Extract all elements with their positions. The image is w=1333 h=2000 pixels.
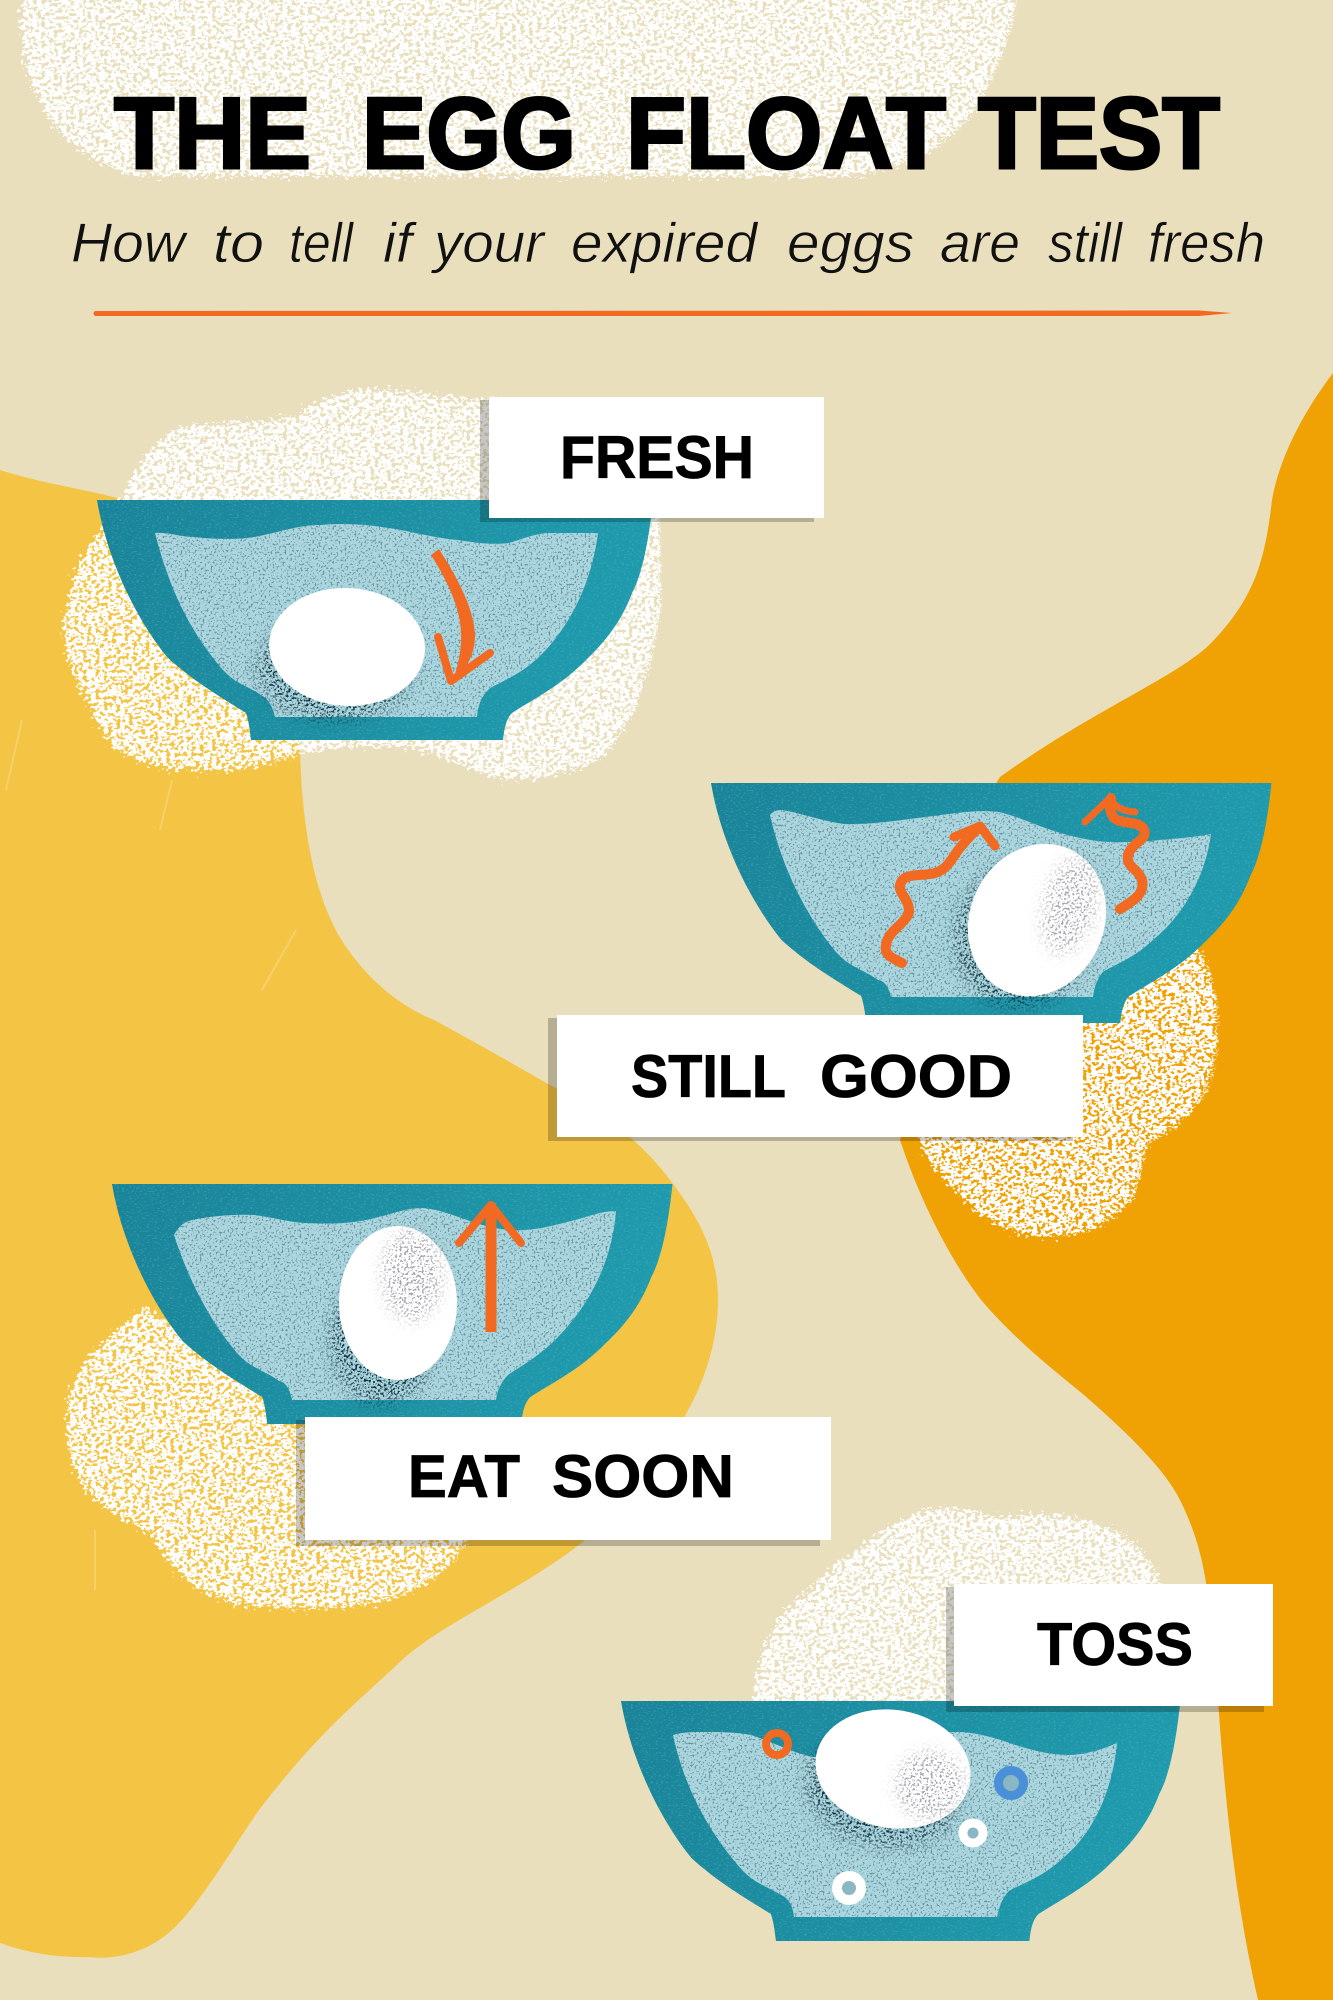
bubble: blue xyxy=(998,1770,1024,1796)
bowl: toss xyxy=(621,1697,1180,1941)
egg xyxy=(806,1697,980,1841)
speckled blob: toss xyxy=(754,1509,1170,1705)
subtitle: your xyxy=(430,211,546,274)
water xyxy=(770,810,1211,997)
speckled blob: top xyxy=(22,0,1018,176)
label: eat soon: EAT xyxy=(408,1443,520,1510)
title: THE xyxy=(114,78,311,190)
egg shadow xyxy=(794,1719,970,1861)
speckled blob: still good xyxy=(900,950,1219,1237)
title: TEST xyxy=(978,78,1220,190)
bowl: still good xyxy=(711,783,1271,1031)
subtitle: How xyxy=(71,211,189,274)
bowl: eat soon xyxy=(112,1184,672,1424)
speckled blob: eat soon xyxy=(68,1308,500,1608)
speckled blob: fresh xyxy=(65,389,662,778)
yellow background shape xyxy=(0,470,718,1958)
orange background shape xyxy=(900,373,1333,2000)
subtitle xyxy=(71,211,1265,274)
bowl body xyxy=(112,1184,672,1424)
water xyxy=(673,1732,1117,1917)
egg xyxy=(943,821,1131,1019)
bowl: fresh xyxy=(97,500,653,740)
arrow: wavy right xyxy=(1085,797,1145,909)
egg speckle xyxy=(382,1229,442,1321)
bowl body xyxy=(711,783,1271,1023)
subtitle: eggs xyxy=(787,211,914,274)
title: EGG xyxy=(362,78,576,190)
subtitle: to xyxy=(213,211,264,274)
label: eat soon xyxy=(296,1417,831,1546)
water xyxy=(155,524,598,717)
label: still good: STILL xyxy=(631,1043,786,1110)
egg shadow xyxy=(330,1276,434,1404)
egg shadow xyxy=(929,839,1115,1031)
bubble: white left xyxy=(837,1876,861,1900)
egg shadow xyxy=(257,616,413,720)
title: FLOAT xyxy=(626,78,946,190)
subtitle: are xyxy=(940,211,1020,274)
subtitle: expired xyxy=(571,211,759,274)
orange brush line xyxy=(94,310,1232,316)
label: eat soon: SOON xyxy=(552,1443,734,1510)
label: fresh xyxy=(480,397,824,522)
arrow: up xyxy=(459,1205,521,1332)
egg xyxy=(339,1226,457,1380)
title xyxy=(114,78,1220,190)
subtitle: still xyxy=(1048,211,1123,274)
bowl body xyxy=(97,500,653,740)
label: still good: GOOD xyxy=(820,1043,1012,1110)
subtitle: if xyxy=(383,211,418,274)
label: toss xyxy=(946,1584,1273,1712)
bowl body xyxy=(621,1701,1180,1941)
bubble: white right xyxy=(963,1823,983,1843)
arrow: wavy left xyxy=(886,826,995,963)
egg speckle xyxy=(896,1751,964,1819)
egg xyxy=(266,584,428,710)
subtitle: tell xyxy=(289,211,354,274)
label: fresh: FRESH xyxy=(560,424,754,491)
label: still good xyxy=(548,1015,1083,1141)
bubble: orange xyxy=(766,1733,788,1755)
label: toss: TOSS xyxy=(1037,1611,1193,1678)
egg speckle xyxy=(1032,850,1108,960)
arrow: down xyxy=(431,549,490,684)
subtitle: fresh xyxy=(1148,211,1265,274)
water xyxy=(174,1208,616,1400)
